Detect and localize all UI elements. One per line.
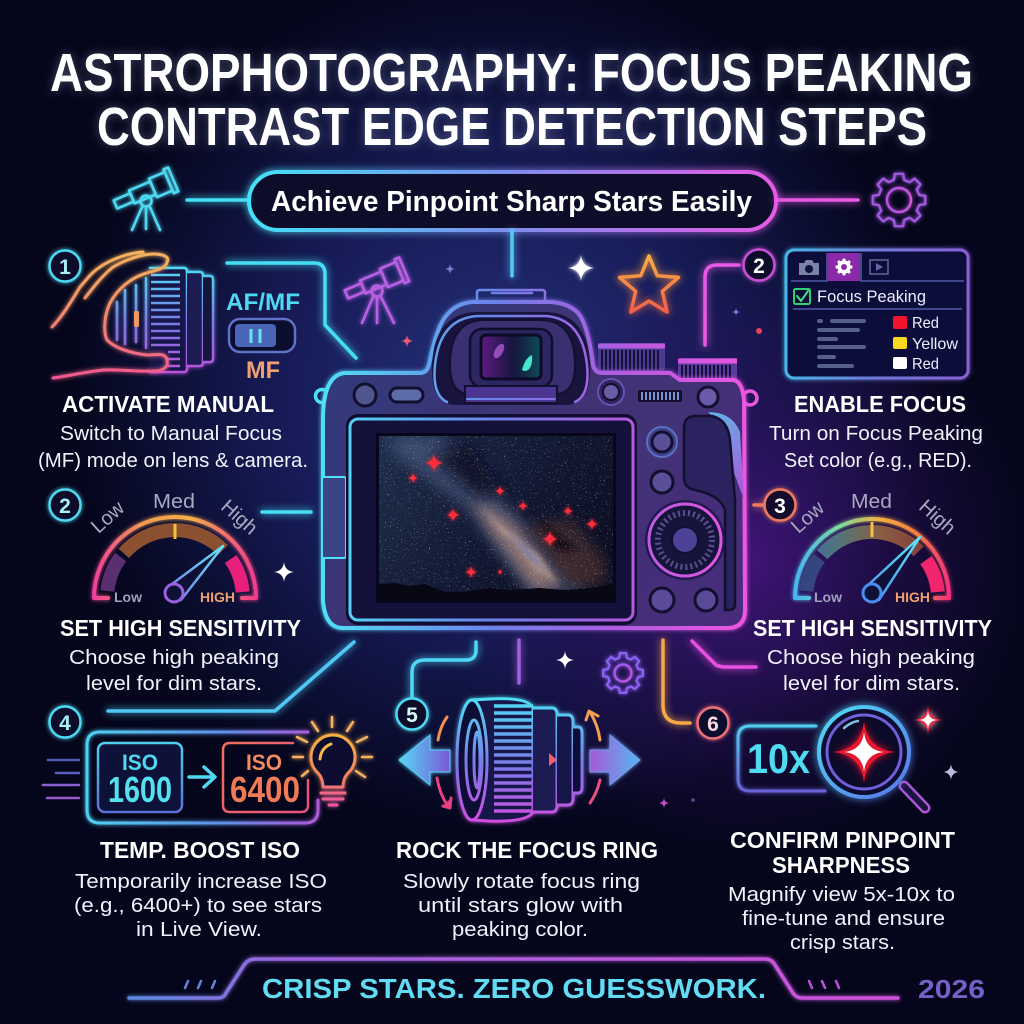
10x magnify label [738, 726, 825, 791]
gauge left: Med [153, 491, 195, 513]
camera screen frame [346, 414, 637, 625]
text: temp boost iso: in Live View. [136, 919, 262, 941]
gauge right: Med [851, 491, 892, 513]
left arrow [399, 735, 450, 785]
step 3 badge [764, 490, 796, 520]
text: enable focus [769, 391, 983, 472]
iso 6400: 6400 [230, 769, 300, 810]
text: activate manual [38, 391, 308, 472]
colour swatches: Red [912, 356, 939, 373]
text: temp boost iso: Temporarily increase ISO [75, 871, 327, 893]
text: confirm pinpoint sharpness [728, 827, 955, 954]
footer banner: 2026 [918, 974, 985, 1004]
right arrow [590, 735, 640, 785]
arrow [189, 767, 215, 787]
step 1: number badge: 1 [59, 256, 71, 279]
step 2 badge left: 2 [59, 495, 71, 518]
af/mf switch: AF/MF [226, 289, 300, 316]
rotation arrows [437, 711, 600, 808]
iso 6400 [223, 743, 308, 812]
icon: hand on lens [52, 252, 213, 378]
step 2 badge right [744, 250, 774, 280]
text: enable focus: Turn on Focus Peaking [769, 423, 983, 445]
icon: telescope cyan [110, 167, 178, 230]
af/mf switch: MF [246, 357, 280, 384]
menu panel: focus peaking [786, 250, 968, 378]
text: confirm pinpoint sharpness: crisp stars. [790, 932, 895, 954]
hand outline [52, 252, 168, 378]
text: confirm pinpoint sharpness: SHARPNESS [772, 852, 910, 878]
footer banner: CRISP STARS. ZERO GUESSWORK. [262, 973, 766, 1004]
icon: red sparkle [914, 706, 942, 734]
text: activate manual: (MF) mode on lens & camera. [38, 450, 308, 472]
iso 6400: ISO [246, 750, 282, 775]
icon: gear magenta [873, 174, 925, 226]
10x magnify label: 10x [747, 735, 811, 782]
text: temp boost iso: (e.g., 6400+) to see stars [74, 895, 322, 917]
iso 1600: ISO [122, 750, 158, 775]
text: rock the focus ring: Slowly rotate focus ring [403, 871, 640, 893]
step 6 badge: 6 [707, 713, 719, 736]
icon: focus ring with arrows [399, 699, 640, 821]
viewfinder [432, 312, 590, 405]
gauge right [787, 491, 960, 605]
step 2 badge right: 2 [753, 255, 765, 278]
connector lines to camera [108, 263, 765, 723]
gauge right: Low [787, 497, 829, 538]
icon: magnifier with star [819, 707, 925, 808]
connector lines from subtitle [187, 200, 858, 276]
gauge right: HIGH [895, 589, 930, 605]
lens ribs [151, 275, 180, 366]
step 4 badge: 4 [59, 712, 71, 735]
text: activate manual: Switch to Manual Focus [60, 423, 282, 445]
gauge left: High [216, 496, 262, 539]
camera buttons top [354, 379, 718, 407]
camera grip [684, 412, 744, 610]
subtitle pill [249, 172, 776, 230]
gauge left [87, 491, 262, 605]
text: rock the focus ring: peaking color. [452, 919, 588, 941]
gauge left: HIGH [200, 589, 235, 605]
checkbox row: Focus Peaking [817, 287, 926, 306]
colour swatches: Yellow [912, 336, 958, 353]
checkbox row [793, 287, 962, 309]
step 2 badge left [50, 490, 80, 520]
text: confirm pinpoint sharpness: fine-tune and ensure [742, 908, 945, 930]
gauge right: High [914, 496, 960, 539]
footer banner [129, 959, 985, 1004]
iso 1600: 1600 [108, 769, 172, 810]
text: activate manual: ACTIVATE MANUAL [62, 391, 274, 417]
step 6 badge [698, 708, 728, 738]
step 4 badge [50, 706, 80, 738]
camera [316, 290, 757, 628]
step 1: number badge [50, 250, 80, 282]
icon: telescope purple [341, 257, 409, 323]
text: set high sensitivity right: Choose high peaking [767, 647, 975, 669]
gauge left: Low [87, 497, 129, 538]
subtitle pill: Achieve Pinpoint Sharp Stars Easily [271, 186, 752, 218]
step 5 badge: 5 [406, 704, 418, 727]
title [50, 43, 973, 157]
colour swatches [893, 315, 958, 373]
text: set high sensitivity left: level for dim stars. [86, 673, 262, 695]
colour swatches: Red [912, 315, 939, 332]
camera flap [322, 477, 346, 558]
lens barrel [457, 699, 582, 821]
text: set high sensitivity left: Choose high peaking [69, 647, 279, 669]
lens ribs [494, 706, 533, 811]
text: set high sensitivity left [60, 615, 301, 695]
text: rock the focus ring [396, 837, 658, 941]
camera body [323, 302, 745, 628]
camera top dials [598, 343, 737, 380]
decorative sparkles and star [274, 255, 959, 808]
text: enable focus: ENABLE FOCUS [794, 391, 966, 417]
gauge right: Low [814, 589, 842, 605]
iso 1600 [98, 743, 182, 812]
text: set high sensitivity right: SET HIGH SENSITIVITY [753, 615, 992, 641]
text: temp boost iso [74, 837, 327, 941]
gauge left: Low [114, 589, 142, 605]
menu tabs [791, 253, 964, 281]
af/mf switch [226, 289, 300, 384]
step 5 badge [396, 698, 428, 730]
camera dial wheel [645, 500, 725, 580]
iso boost diagram [43, 717, 372, 823]
text: set high sensitivity right [753, 615, 992, 695]
camera buttons right [647, 427, 717, 612]
camera strap lugs [316, 390, 757, 405]
text: enable focus: Set color (e.g., RED). [784, 450, 972, 472]
photo: milky way with peaking stars [379, 436, 613, 600]
lens barrel [117, 268, 213, 372]
text: temp boost iso: TEMP. BOOST ISO [100, 837, 300, 863]
icon: small gear [603, 653, 643, 693]
text: confirm pinpoint sharpness: Magnify view 5x-10x to [728, 884, 955, 906]
text: set high sensitivity left: SET HIGH SENSITIVITY [60, 615, 301, 641]
icon: light bulb [293, 717, 372, 805]
setting bars [817, 319, 866, 368]
text: rock the focus ring: ROCK THE FOCUS RING [396, 837, 658, 863]
text: set high sensitivity right: level for dim stars. [783, 673, 960, 695]
speed lines [43, 760, 79, 798]
text: confirm pinpoint sharpness: CONFIRM PINPOINT [730, 827, 955, 853]
peaking stars [408, 454, 598, 578]
step 3 badge: 3 [774, 495, 786, 518]
text: rock the focus ring: until stars glow with [418, 895, 623, 917]
hot shoe [477, 290, 545, 302]
